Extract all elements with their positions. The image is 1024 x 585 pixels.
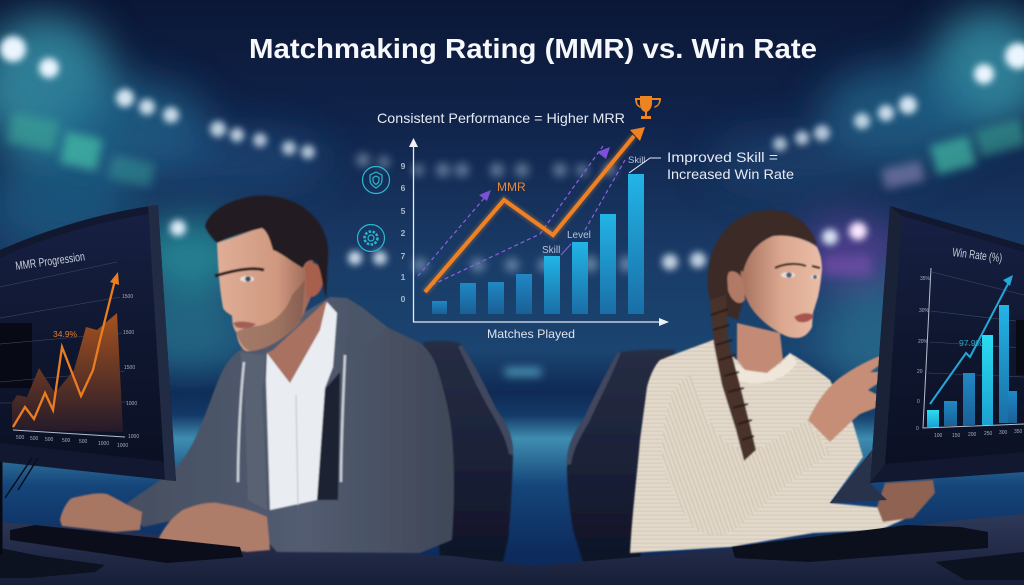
eye and brow	[215, 269, 264, 276]
axes	[923, 268, 1024, 428]
hoodie	[127, 297, 454, 553]
monitor axis ticks: 250	[984, 431, 993, 437]
grid lines	[928, 272, 1024, 377]
man at left	[60, 196, 454, 553]
percentage: 34.9%	[53, 329, 78, 339]
pointing hand	[808, 355, 884, 442]
callout: improved skill: Increased Win Rate	[667, 166, 794, 182]
right chair	[567, 350, 675, 562]
ear	[305, 263, 323, 297]
monitor axis ticks: 20%	[918, 339, 929, 345]
desk	[0, 514, 1024, 585]
monitor axis ticks: 1000	[117, 443, 128, 449]
neck	[737, 323, 783, 373]
monitor axis ticks: 1500	[123, 330, 134, 336]
monitor axis ticks: 150	[952, 433, 961, 439]
monitor axis ticks: 500	[45, 437, 54, 443]
sweater	[630, 340, 907, 553]
right monitor	[830, 206, 1024, 503]
right monitor base	[935, 552, 1024, 580]
title: Matchmaking Rating (MMR) vs. Win Rate	[249, 33, 817, 64]
monitor axis ticks: 1000	[126, 401, 137, 407]
y axis numbers	[401, 161, 406, 304]
MMR area chart	[12, 313, 123, 432]
face	[741, 236, 822, 338]
left hand	[60, 493, 142, 532]
chart caption: Consistent Performance = Higher MRR	[377, 110, 625, 126]
icon: shield	[362, 166, 390, 194]
monitor axis ticks: 350	[1014, 429, 1023, 435]
dashed purple trend arrows	[418, 146, 625, 285]
ear	[727, 271, 745, 303]
monitor frame	[0, 205, 176, 481]
orange line	[13, 280, 115, 427]
monitor title: MMR Progression	[14, 249, 86, 273]
monitor axis ticks: 1500	[122, 294, 133, 300]
icon: trophy	[635, 96, 661, 119]
y axis numbers: 6	[401, 183, 406, 193]
monitor axis ticks: 1000	[98, 441, 109, 447]
monitor bars	[927, 305, 1017, 427]
y axis numbers: 0	[401, 294, 406, 304]
monitor axis ticks: 30%	[919, 308, 930, 314]
central MMR chart	[358, 96, 794, 341]
hood fold	[340, 298, 387, 370]
drawstrings	[238, 355, 345, 482]
monitor axis ticks: 500	[62, 438, 71, 444]
y axis numbers: 7	[401, 251, 406, 261]
monitor arm triangle	[830, 450, 887, 503]
hair front	[710, 212, 816, 300]
shirt	[266, 302, 337, 510]
percentage: 97.9%	[959, 338, 984, 348]
callout: improved skill	[629, 149, 794, 182]
inner dark lining	[316, 372, 340, 500]
mouth	[794, 313, 814, 322]
eyes and brows	[775, 264, 820, 268]
orange MMR line	[425, 127, 645, 292]
left monitor	[0, 205, 176, 555]
monitor frame	[870, 206, 1024, 483]
braid	[710, 295, 756, 461]
blue trend arrow	[930, 282, 1009, 404]
monitor axis ticks: 20	[917, 369, 923, 375]
woman at right	[630, 210, 935, 553]
hood edge left	[240, 352, 267, 510]
bar labels: Level	[567, 230, 591, 241]
monitor axis ticks: 35%	[920, 276, 931, 282]
left monitor base	[0, 548, 105, 578]
monitor axis ticks: 500	[16, 435, 25, 441]
monitor axis ticks: 1500	[124, 365, 135, 371]
face	[217, 226, 318, 351]
monitor title: Win Rate (%)	[952, 245, 1003, 265]
bars: win rate	[432, 174, 644, 314]
monitor axis ticks: 0	[916, 426, 919, 432]
MMR label: MMR	[497, 180, 526, 194]
mouth	[233, 321, 256, 328]
y axis numbers: 5	[401, 206, 406, 216]
monitor axis ticks: 1000	[128, 434, 139, 440]
hair back	[708, 210, 817, 320]
right keyboard	[732, 525, 988, 562]
y axis numbers: 2	[401, 228, 406, 238]
right hand	[158, 503, 270, 552]
x axis label: Matches Played	[487, 327, 575, 341]
monitor stand	[0, 323, 32, 388]
hair	[205, 196, 328, 298]
bar labels: Skill	[628, 155, 645, 166]
grid lines	[0, 262, 127, 403]
monitor axis ticks: 300	[999, 430, 1008, 436]
chart axes	[409, 138, 669, 326]
bar labels: Skill	[542, 245, 560, 256]
y axis numbers: 9	[401, 161, 406, 171]
monitor axis ticks	[916, 276, 1023, 439]
monitor axis ticks: 500	[79, 439, 88, 445]
callout: improved skill: Improved Skill =	[667, 149, 778, 165]
icon: gear	[358, 224, 384, 252]
bar labels	[542, 155, 645, 256]
monitor axis ticks: 200	[968, 432, 977, 438]
lower hand	[877, 480, 935, 522]
monitor axis ticks: 500	[30, 436, 39, 442]
sweater sleeve	[662, 375, 830, 535]
collar	[735, 353, 797, 383]
monitor stand	[1016, 320, 1024, 375]
monitor axis ticks	[16, 294, 139, 449]
beard shadow	[236, 280, 305, 351]
monitor axis ticks: 100	[934, 433, 943, 439]
y axis numbers: 1	[401, 272, 406, 282]
monitor axis ticks: 0	[917, 399, 920, 405]
left keyboard	[10, 525, 243, 563]
neck	[267, 300, 327, 383]
left chair	[423, 341, 513, 562]
